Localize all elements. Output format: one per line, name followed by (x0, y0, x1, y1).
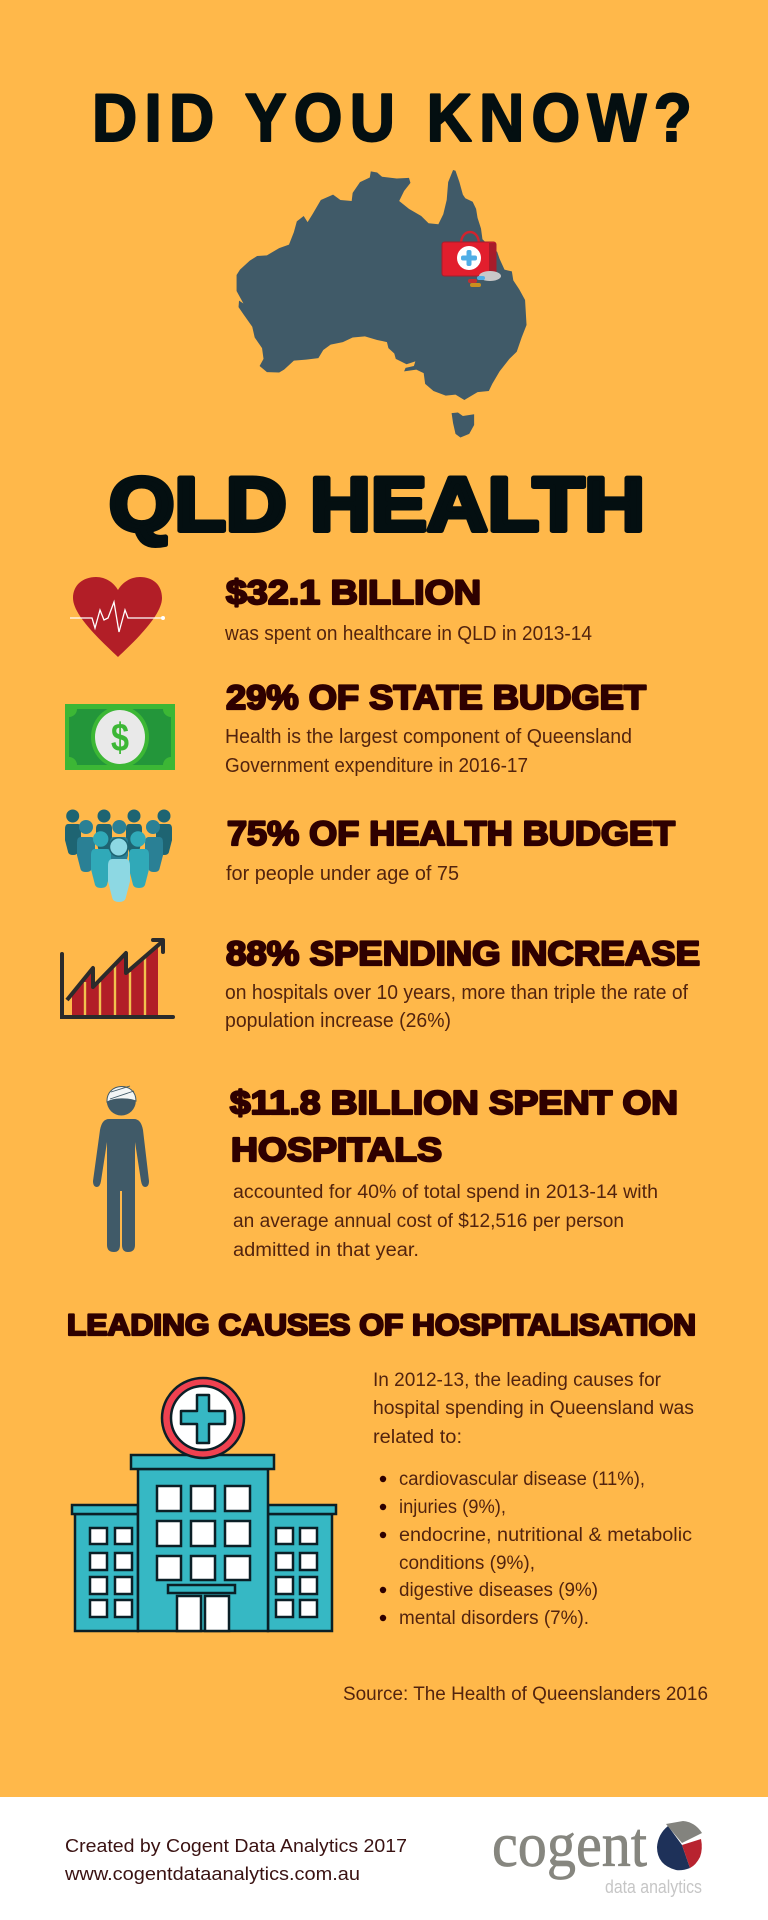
stat heading: $11.8 BILLION SPENT ON (230, 1084, 678, 1121)
stat description: an average annual cost of $12,516 per person (233, 1211, 624, 1232)
stat description: Government expenditure in 2016-17 (225, 755, 528, 777)
stat description: Health is the largest component of Queensland (225, 726, 632, 748)
title: did you know: DID YOU KNOW? (92, 80, 692, 156)
stat description: population increase (26%) (225, 1010, 451, 1032)
icon: medical bag (442, 232, 501, 287)
logo: cogent data analytics: cogent (492, 1810, 647, 1880)
list: leading causes: injuries (9%), (399, 1497, 506, 1518)
heading: qld health: QLD HEALTH (109, 462, 645, 548)
stat heading: HOSPITALS (231, 1131, 442, 1168)
heading: leading causes: LEADING CAUSES OF HOSPITALISATION (67, 1309, 696, 1342)
footer credit text (64, 1835, 407, 1884)
stat heading (230, 1084, 678, 1168)
stat description (233, 1182, 658, 1261)
text block: intro to leading causes: hospital spending in Queensland was (373, 1398, 694, 1419)
icon: banknote: $ (111, 716, 129, 760)
footer credit text: Created by Cogent Data Analytics 2017 (65, 1835, 407, 1856)
icon: hospital building (72, 1378, 336, 1631)
stat heading: 88% SPENDING INCREASE (226, 935, 700, 973)
icon: injured person (93, 1086, 149, 1252)
stat: 11.8 billion spent on hospitals (93, 1084, 678, 1261)
icon: rising bar chart (62, 940, 173, 1017)
list: leading causes: conditions (9%), (399, 1553, 535, 1574)
list: leading causes: cardiovascular disease (11%), (399, 1469, 645, 1490)
stat description: admitted in that year. (233, 1240, 419, 1261)
icon: group of people (65, 810, 172, 902)
stat: 32.1 billion (70, 574, 592, 657)
stat heading: $32.1 BILLION (226, 574, 481, 612)
stat: 88 percent spending increase (62, 935, 700, 1032)
map of Australia with medical kit (237, 170, 527, 437)
list: leading causes (380, 1469, 692, 1629)
text block: intro to leading causes: In 2012-13, the leading causes for (373, 1370, 662, 1391)
stat description: for people under age of 75 (226, 863, 459, 885)
text block: intro to leading causes (373, 1370, 694, 1448)
text block: intro to leading causes: related to: (373, 1427, 462, 1448)
list: leading causes: mental disorders (7%). (399, 1608, 589, 1629)
source note: Source: The Health of Queenslanders 2016 (343, 1684, 708, 1705)
icon: banknote (65, 704, 175, 770)
stat heading: 29% OF STATE BUDGET (226, 679, 646, 717)
stat heading: 75% OF HEALTH BUDGET (227, 815, 675, 853)
stat description: accounted for 40% of total spend in 2013-14 with (233, 1182, 658, 1203)
logo: cogent data analytics (492, 1810, 702, 1897)
stat description (225, 982, 688, 1032)
list: leading causes: digestive diseases (9%) (399, 1580, 598, 1601)
stat description (225, 726, 632, 777)
icon: heart with pulse (70, 577, 165, 657)
stat: 75 percent of health budget (65, 810, 675, 902)
list: leading causes: endocrine, nutritional & metabolic (399, 1525, 692, 1546)
footer credit text: www.cogentdataanalytics.com.au (64, 1863, 360, 1884)
stat: 29 percent of state budget (65, 679, 646, 777)
logo: cogent data analytics: data analytics (605, 1877, 702, 1897)
panel: footer (0, 1797, 768, 1920)
stat description: on hospitals over 10 years, more than triple the rate of (225, 982, 688, 1004)
stat description: was spent on healthcare in QLD in 2013-14 (224, 623, 592, 645)
